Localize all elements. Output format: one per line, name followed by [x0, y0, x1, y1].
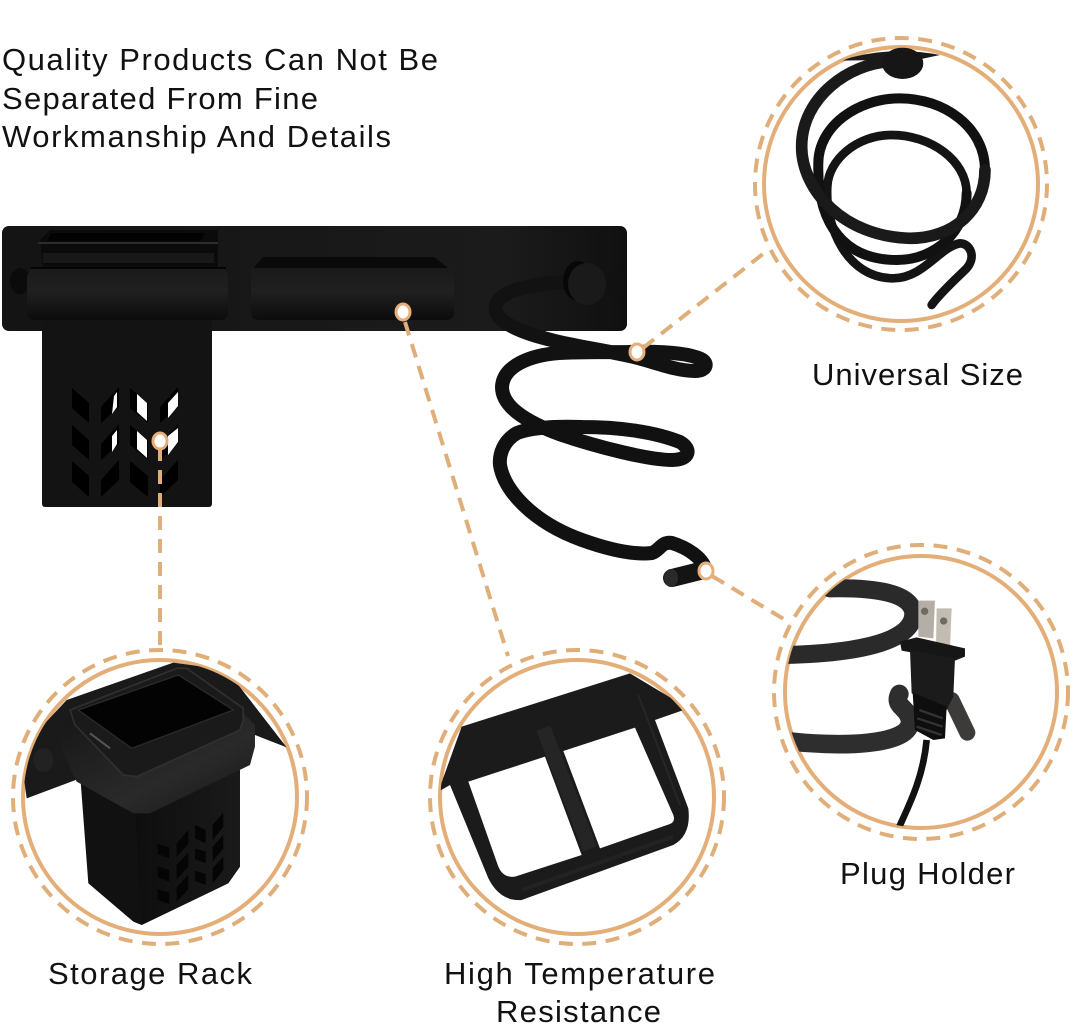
- detail ring solid: [23, 660, 297, 934]
- label: universal size: Universal Size: [812, 357, 1023, 392]
- marker dot: spiral: [630, 344, 644, 360]
- label: plug holder: Plug Holder: [840, 856, 1015, 891]
- marker dot: storage: [153, 433, 167, 449]
- detail ring dashed: [755, 38, 1047, 330]
- main product: wall-mounted rack: [2, 226, 706, 587]
- leader line: storage rack: [158, 447, 162, 652]
- detail ring dashed: [13, 650, 307, 944]
- title: Separated From Fine: [2, 81, 318, 116]
- leader line: high temperature: [405, 322, 508, 656]
- storage cup: [10, 230, 228, 507]
- label: high temperature resistance: High Temperature: [444, 956, 715, 991]
- icon: storage cup close-up: [20, 663, 287, 925]
- title: Quality Products Can Not Be: [2, 42, 438, 77]
- panel: universal size: [755, 38, 1047, 330]
- title: [2, 42, 438, 154]
- leader line: universal size: [643, 250, 768, 348]
- panel: high temperature resistance: [430, 650, 724, 944]
- cup holes: [72, 387, 178, 497]
- panel: plug holder: [774, 545, 1068, 839]
- icon: comb frame close-up: [438, 673, 689, 900]
- panel: storage rack: [13, 650, 307, 944]
- marker dot: comb holder: [396, 304, 410, 320]
- leader line: plug holder: [712, 576, 792, 624]
- back plate: [2, 226, 627, 331]
- icon: plug on hook: [783, 588, 967, 827]
- detail ring dashed: [774, 545, 1068, 839]
- spiral dryer holder: [496, 282, 706, 587]
- marker dot: plug hook: [699, 563, 713, 579]
- icon: coil close-up: [802, 48, 985, 305]
- label: high temperature resistance: [444, 956, 715, 1024]
- detail ring solid: [440, 660, 714, 934]
- comb holder: [251, 257, 454, 320]
- mounting knob: [563, 261, 627, 305]
- detail ring solid: [785, 556, 1057, 828]
- title: Workmanship And Details: [2, 119, 391, 154]
- detail ring dashed: [430, 650, 724, 944]
- detail ring solid: [764, 47, 1038, 321]
- label: storage rack: Storage Rack: [48, 956, 252, 991]
